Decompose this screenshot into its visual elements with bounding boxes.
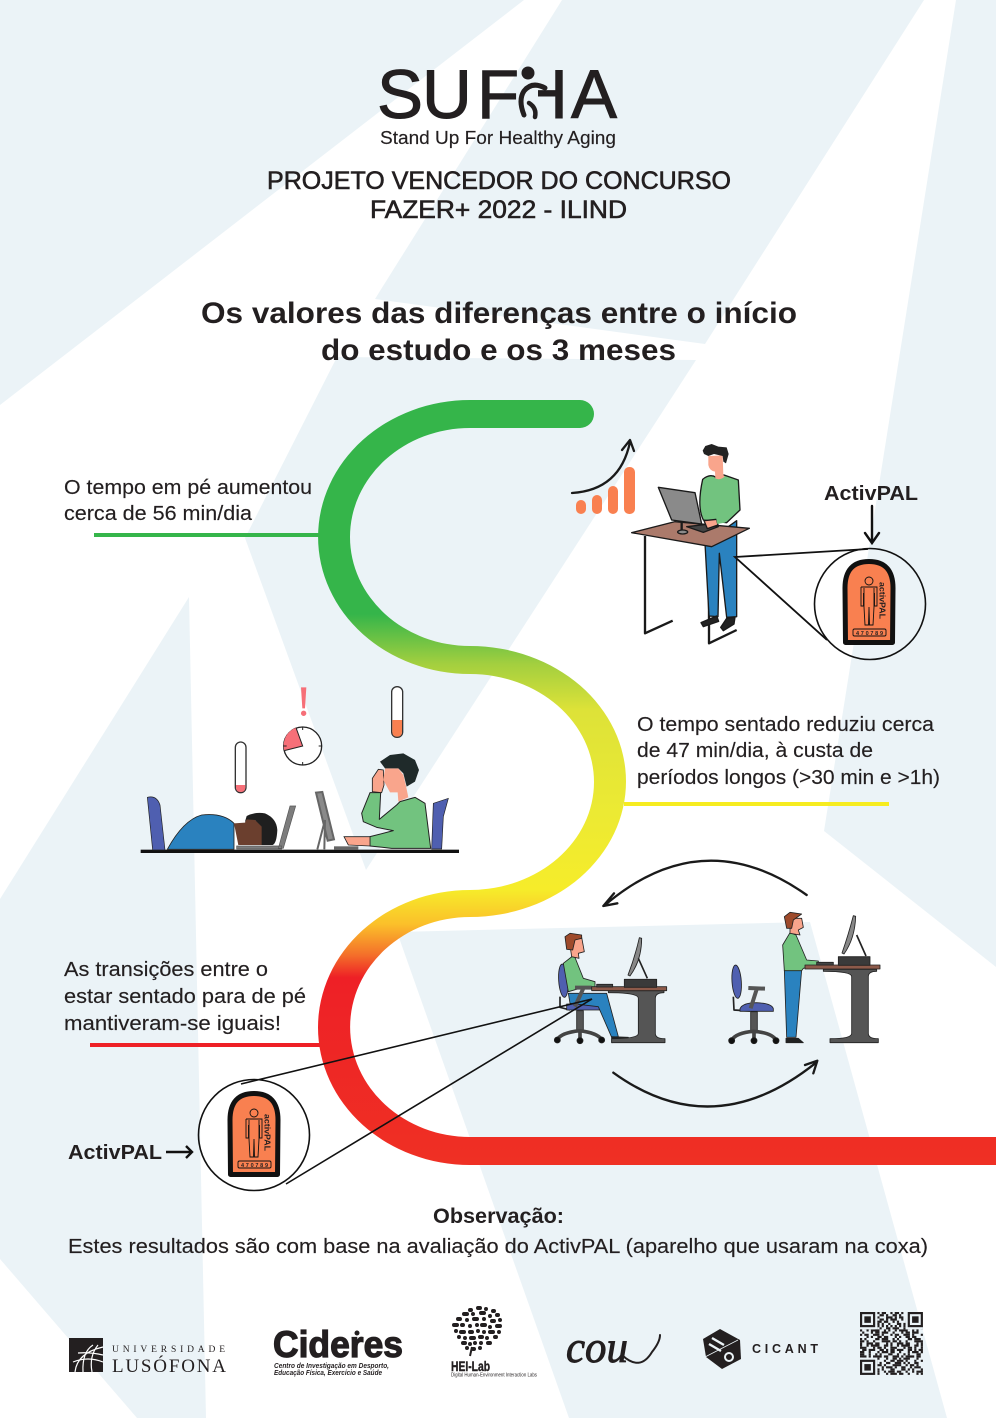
exclamation: [301, 687, 306, 716]
logo: Universidade Lusófona: UNIVERSIDADE: [112, 1345, 225, 1355]
arrow: top cycle: [603, 861, 807, 906]
clock: [284, 727, 322, 765]
logo: Cideres: Educação Física, Exercício e Saúde: [274, 1370, 382, 1377]
logo: Universidade Lusófona: [69, 1338, 226, 1377]
logo: CICANT: [703, 1329, 818, 1369]
logo: COU: cou: [566, 1323, 628, 1372]
left chair: [147, 797, 165, 850]
callout: sitting time: de 47 min/dia, à custa de: [637, 739, 873, 762]
callout lines: lower sensor: [241, 999, 592, 1184]
logo: CICANT: CICANT: [752, 1342, 818, 1356]
heading: do estudo e os 3 meses: [321, 334, 676, 367]
icon: activPAL sensor top: 470789: [856, 631, 883, 637]
logo: SUFHA: [380, 66, 618, 148]
callout: transitions: [64, 958, 320, 1047]
illustration: seated at desk: [554, 933, 667, 1044]
note: Observação:: [433, 1205, 564, 1228]
title: contest winner: PROJETO VENCEDOR DO CONCURSO: [267, 167, 731, 195]
logo: SUFHA: A: [571, 56, 617, 133]
icon: rising bar chart: [572, 440, 635, 514]
callout: standing time: O tempo em pé aumentou: [64, 476, 312, 499]
callout: transitions: As transições entre o: [64, 958, 268, 981]
heading: Os valores das diferenças entre o início: [201, 297, 797, 330]
logo: Universidade Lusófona: LUSÓFONA: [112, 1355, 226, 1377]
logo: SUFHA: H: [518, 56, 568, 133]
callout: transitions: mantiveram-se iguais!: [64, 1012, 281, 1035]
gradient S path: [318, 400, 996, 1165]
thermometer low: [235, 742, 246, 793]
note: [68, 1205, 928, 1258]
desk line: [141, 850, 459, 853]
callout: sitting time: períodos longos (>30 min e >1h): [637, 766, 940, 789]
logo: Cideres: Cideres: [273, 1324, 403, 1365]
title: contest winner: [267, 167, 731, 224]
icon: activPAL sensor lower: [198, 1080, 310, 1190]
logo: COU: [566, 1323, 660, 1372]
icon: activPAL sensor top: [814, 548, 926, 660]
illustration: standing at desk: [729, 912, 880, 1044]
tired man: [344, 753, 431, 848]
illustration: tired office workers: [141, 687, 459, 853]
callout: sitting time: O tempo sentado reduziu cerca: [637, 713, 935, 736]
monitor: [316, 792, 334, 849]
callout: standing time: [64, 476, 320, 537]
illustration: man at standing desk: [632, 444, 749, 643]
QR code: [860, 1312, 923, 1375]
thermometer mid: [392, 687, 403, 737]
sleeping man: [167, 813, 277, 849]
logo: SUFHA: Stand Up For Healthy Aging: [380, 128, 616, 148]
logo: SUFHA: SUF: [377, 56, 519, 133]
note: Estes resultados são com base na avaliação do ActivPAL (aparelho que usaram na coxa): [68, 1235, 928, 1258]
arrow: down to sensor: [865, 506, 879, 543]
logo: HEI-Lab: HEI-Lab: [451, 1358, 490, 1374]
callout: transitions: estar sentado para de pé: [64, 985, 306, 1008]
logo: HEI-Lab: Digital Human-Environment Interaction Labs: [451, 1372, 537, 1378]
heading: [201, 297, 797, 367]
callout: sitting time: [624, 713, 940, 806]
logo: HEI-Lab: [451, 1308, 537, 1378]
label: ActivPAL top: ActivPAL: [824, 482, 918, 505]
logo: Cideres: Centro de Investigação em Desporto,: [274, 1363, 389, 1370]
label: ActivPAL lower: ActivPAL: [68, 1141, 162, 1164]
callout lines: sensor on thigh: [735, 549, 868, 640]
laptop: [237, 806, 296, 849]
title: contest winner: FAZER+ 2022 - ILIND: [370, 196, 627, 224]
arrow: bottom cycle: [613, 1061, 817, 1106]
icon: activPAL sensor lower: activPAL: [262, 1114, 272, 1151]
callout: standing time: cerca de 56 min/dia: [64, 502, 253, 525]
arrow: right to sensor: [166, 1146, 192, 1158]
right chair: [432, 798, 448, 849]
icon: activPAL sensor top: activPAL: [878, 582, 888, 619]
icon: activPAL sensor lower: 470789: [241, 1163, 268, 1169]
